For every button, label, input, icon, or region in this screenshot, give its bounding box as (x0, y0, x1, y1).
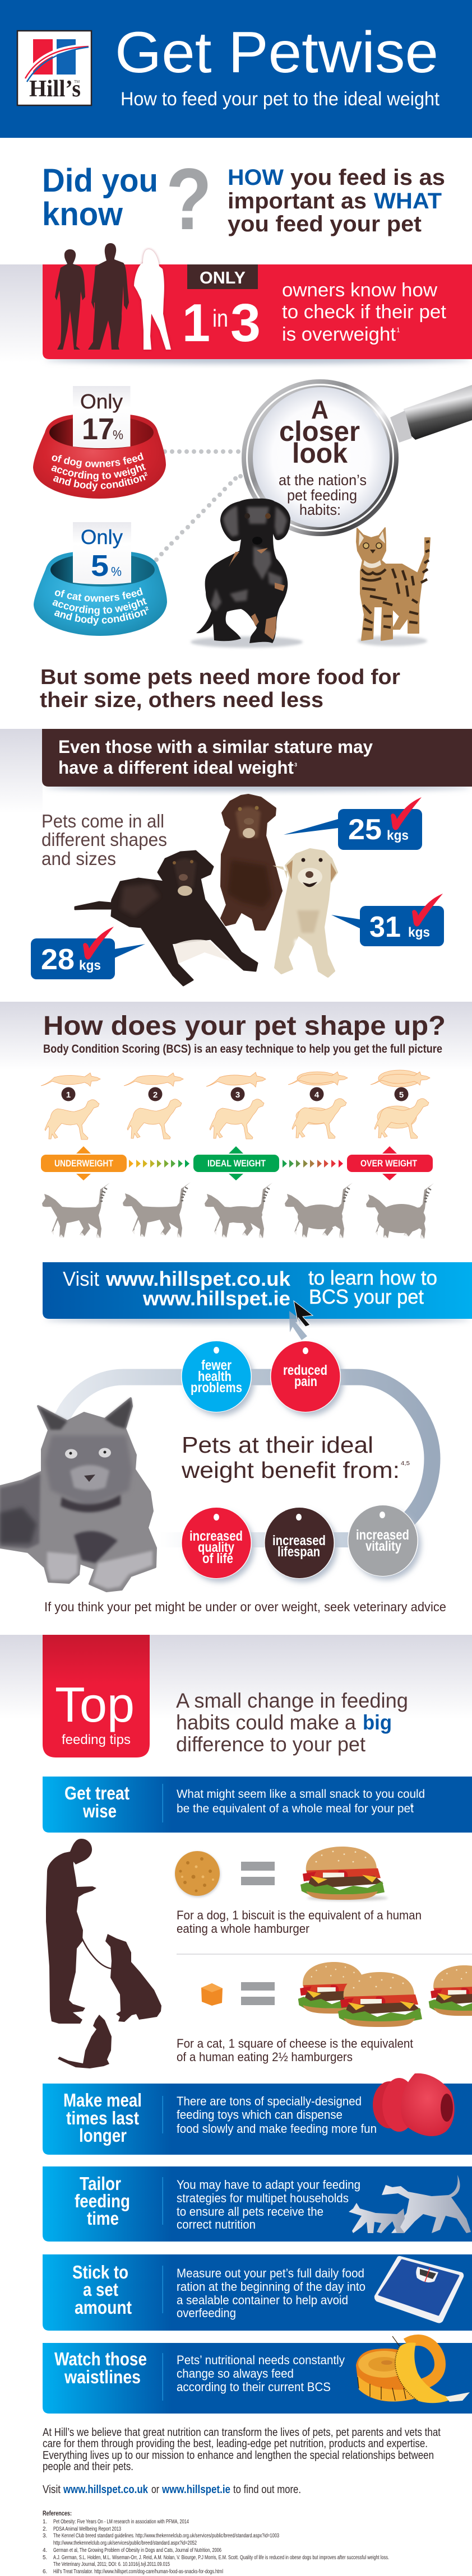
text: pets come in all shapes (41, 811, 167, 869)
score numbers: 5 (399, 1090, 404, 1100)
intro text (176, 1689, 408, 1756)
panel: visit website banner: www.hillspet.co.uk (105, 1267, 291, 1290)
icon: red feeding toy (373, 2073, 455, 2136)
tip bar: make meal times last longer: Make meal (63, 2090, 142, 2110)
tip bar: tailor feeding time: to ensure all pets receive the (177, 2205, 323, 2219)
icon: grey cat (0, 1398, 156, 1591)
callout: 31 kgs (331, 894, 444, 946)
tag: reduced pain (270, 1341, 344, 1416)
red tab: Top (55, 1677, 135, 1732)
references: Hill's Treat Translator. http://www.hillspet.com/dog-care/human-food-as-snacks-for-dogs.html (53, 2569, 223, 2575)
icon: blue cat bowl with 5 percent: 5 (91, 549, 109, 583)
tip bar: stick to a set amount: Measure out your pet’s full daily food (177, 2266, 364, 2280)
callout: 25 kgs (284, 797, 422, 850)
text: visit links: or (151, 2483, 159, 2496)
icon: red dog bowl with 17 percent: and body condition² (53, 472, 148, 491)
intro text: difference to your pet (176, 1733, 366, 1756)
heading: how does your pet shape up: How does your pet shape up? (43, 1011, 446, 1041)
icon: Hill's logo (17, 31, 91, 105)
tag: reduced pain: pain (294, 1374, 317, 1389)
tip bar: stick to a set amount: amount (75, 2297, 132, 2318)
tip bar: get treat wise: be the equivalent of a whole meal for your pet (177, 1802, 414, 1815)
text: a closer look: pet feeding (287, 487, 357, 504)
underweight label (41, 1146, 127, 1180)
tag: increased vitality: increased (356, 1527, 409, 1543)
text: cat cheese equivalent: For a cat, 1 square of cheese is the equivalent (177, 2036, 413, 2050)
tip bar: tailor feeding time: Tailor (80, 2173, 121, 2194)
callout: 31 kgs: 31 (369, 911, 401, 943)
text: pets come in all shapes: different shapes (41, 829, 167, 850)
icon: blue cat bowl with 5 percent: % (111, 564, 122, 579)
references: 1. (43, 2519, 47, 2525)
tip bar: make meal times last longer: There are tons of specially-designed (177, 2094, 362, 2108)
tip bar: make meal times last longer: times last (66, 2108, 139, 2128)
side view dogs (45, 1099, 429, 1140)
heading: some pets need more food: their size, others need less (40, 689, 323, 712)
score numbers: 1 (66, 1090, 71, 1100)
key message: you feed is as (290, 165, 445, 190)
stat text: is overweight (282, 324, 396, 345)
icon: red dog bowl with 17 percent: Only (80, 390, 123, 413)
yellow labrador (272, 849, 337, 977)
references: 2. (43, 2526, 47, 2532)
tip bar: stick to a set amount: ration at the beginning of the day into (177, 2280, 365, 2294)
underweight label: UNDERWEIGHT (54, 1158, 113, 1169)
score numbers (62, 1087, 408, 1101)
tip bar: watch those waistlines: waistlines (64, 2366, 141, 2387)
text: a closer look: at the nation’s (279, 472, 367, 489)
tag: fewer health problems: fewer (201, 1357, 232, 1373)
references: 5. (43, 2555, 47, 2561)
tip bar: get treat wise: Get treat (64, 1783, 129, 1803)
score numbers: 4 (314, 1090, 320, 1100)
tip bar: get treat wise: 6 (410, 1803, 414, 1809)
1 in 3 stat: in (212, 305, 228, 332)
ideal weight label (193, 1146, 279, 1180)
callout: 28 kgs (31, 927, 145, 979)
1 in 3 stat: 3 (230, 293, 261, 353)
arrows to ideal (129, 1160, 189, 1168)
text: visit links: Visit (43, 2483, 61, 2496)
references: 4. (43, 2547, 47, 2554)
tip bar: tailor feeding time: correct nutrition (177, 2217, 256, 2231)
tip bar: make meal times last longer: food slowly and make feeding more fun (177, 2122, 377, 2136)
icon: blue cat bowl with 5 percent: according to weight (53, 598, 147, 616)
references: Pet Obesity: Five Years On - LM research in association with PFMA, 2014 (53, 2519, 189, 2525)
benefits ring track (60, 1377, 432, 1547)
tip bar: get treat wise (43, 1777, 472, 1833)
text: pets come in all shapes: and sizes (41, 848, 116, 869)
icon: magnifying glass (242, 379, 472, 536)
icon: blue cat bowl with 5 percent: and body condition² (54, 606, 149, 626)
icon: Hill's logo: TM (74, 80, 80, 84)
red tab (43, 1635, 150, 1757)
text: dog biscuit equivalent (177, 1908, 422, 1936)
text: seek veterinary advice: If you think your pet might be under or over weight, seek veterinary advice (44, 1599, 446, 1614)
text: a closer look: look (292, 438, 348, 469)
key message (228, 165, 445, 236)
panel: visit website banner: BCS your pet (309, 1285, 424, 1308)
tip bar: stick to a set amount (43, 2254, 472, 2331)
weight scale legend (41, 1146, 433, 1180)
paragraph: about Hill's (43, 2426, 441, 2473)
icon: blue cat bowl with 5 percent (34, 522, 167, 636)
callout: 25 kgs: kgs (387, 828, 409, 843)
heading: some pets need more food: But some pets need more food for (40, 666, 400, 689)
key message: important as (228, 189, 367, 213)
tag: increased quality of life: quality (198, 1540, 234, 1555)
stat text (282, 280, 447, 345)
tag: increased vitality (348, 1505, 421, 1580)
icon: red dog bowl with 17 percent: according to weight (52, 463, 146, 482)
panel: body condition scoring (0, 1002, 472, 1070)
references: The Veterinary Journal, 2011; DOI: 6. 10.1016/j.tvjl.2011.09.015 (53, 2561, 170, 2568)
red tab: feeding tips (62, 1732, 131, 1747)
tag: fewer health problems: health (198, 1369, 232, 1384)
callout: 28 kgs: 28 (41, 943, 75, 976)
tag: fewer health problems (181, 1341, 254, 1416)
tip bar: stick to a set amount: overfeeding (177, 2306, 236, 2320)
tip bar: watch those waistlines: Watch those (54, 2349, 147, 2369)
icon: cheese cube (201, 1983, 223, 2006)
references: German et al, The Growing Problem of Obesity in Dogs and Cats, Journal of Nutrition, 2006 (53, 2547, 221, 2554)
references: PDSA Animal Wellbeing Report 2013 (53, 2526, 121, 2532)
tip bar: make meal times last longer: feeding toys which can dispense (177, 2108, 343, 2122)
callout: 25 kgs: 25 (348, 813, 382, 846)
heading: some pets need more food (40, 666, 400, 712)
panel: visit website banner (43, 1262, 472, 1323)
tip bar: tailor feeding time: time (87, 2208, 119, 2229)
icon: two and a half hamburgers (298, 1962, 472, 2027)
icon: blue cat bowl with 5 percent: of cat owners feed (55, 587, 143, 602)
icon: cursor arrow (289, 1301, 313, 1340)
score numbers: 2 (153, 1090, 158, 1100)
intro text: habits could make a (176, 1711, 356, 1734)
panel: visit website banner: www.hillspet.ie (142, 1287, 290, 1310)
tag: increased lifespan: lifespan (277, 1544, 320, 1560)
tag: increased lifespan (264, 1507, 337, 1582)
tag: increased quality of life: increased (189, 1528, 243, 1544)
side view cats (42, 1182, 434, 1239)
icon: equals sign cat (241, 1982, 275, 2005)
stat text: 1 (396, 326, 400, 334)
icon: man with dog and cat silhouettes (46, 1839, 161, 2068)
panel: similar stature banner: Even those with a similar stature may (58, 737, 373, 757)
tag: fewer health problems: problems (191, 1380, 242, 1396)
icon: three labradors (75, 795, 337, 985)
stat text: to check if their pet (282, 301, 447, 323)
text: a closer look: A (311, 395, 328, 424)
tip bar: tailor feeding time: strategies for multipet households (177, 2191, 349, 2205)
over weight label: OVER WEIGHT (360, 1158, 418, 1169)
1 in 3 stat (182, 293, 261, 353)
panel: top feeding tips (0, 1635, 472, 1757)
icon: weighing scale (374, 2256, 464, 2323)
icon: equals sign dog (241, 1862, 275, 1885)
references: 6. (43, 2569, 47, 2575)
icon: hamburger (300, 1847, 388, 1901)
icon: red dog bowl with 17 percent: 17 (82, 412, 114, 446)
tip bar: watch those waistlines: change so always feed (177, 2366, 294, 2380)
callout: 31 kgs: kgs (408, 925, 430, 940)
only tag (187, 264, 258, 289)
panel: 1 in 3 owners (0, 243, 472, 364)
text: visit links: www.hillspet.co.uk (63, 2483, 148, 2496)
score numbers: 3 (235, 1090, 240, 1100)
text: pets at ideal weight: weight benefit from: (181, 1457, 400, 1483)
icon: silver dog and cat (349, 2175, 471, 2233)
over weight label (347, 1146, 433, 1180)
paragraph: about Hill's: people and their pets. (43, 2460, 133, 2473)
text: dog biscuit equivalent: eating a whole hamburger (177, 1922, 309, 1936)
text: visit links: to find out more. (233, 2483, 301, 2496)
only tag: ONLY (200, 268, 246, 287)
tag: increased quality of life (181, 1507, 254, 1582)
text: a closer look (279, 395, 367, 518)
text: cat cheese equivalent (177, 2036, 413, 2064)
icon: Hill's logo: Hill’s (29, 76, 81, 102)
icon: red dog bowl with 17 percent: % (113, 427, 123, 442)
did you know heading: Did you (42, 162, 158, 199)
text: cat cheese equivalent: of a human eating 2½ hamburgers (177, 2050, 353, 2064)
icon: blue cat bowl with 5 percent: Only (81, 526, 123, 548)
arrows to over (283, 1160, 343, 1168)
tip bar: stick to a set amount: Stick to (72, 2262, 128, 2282)
text: a closer look: habits: (299, 501, 341, 518)
icon: measuring tape (356, 2336, 470, 2403)
stat text: owners know how (282, 280, 437, 301)
key message: WHAT (374, 189, 442, 213)
text: visit links: www.hillspet.ie (161, 2483, 230, 2496)
header banner (0, 0, 472, 138)
text: pets come in all shapes: Pets come in all (41, 811, 164, 831)
tip bar: watch those waistlines: according to their current BCS (177, 2380, 331, 2394)
references: 3. (43, 2533, 47, 2539)
1 in 3 stat: 1 (182, 293, 210, 353)
text: pets at ideal weight: Pets at their ideal (182, 1432, 373, 1458)
people silhouettes (55, 243, 171, 350)
references: References: (43, 2509, 72, 2517)
dotted connector lines (154, 449, 243, 562)
text: pets at ideal weight (181, 1432, 410, 1483)
tip bar: get treat wise: wise (82, 1801, 117, 1821)
title: Get Petwise (115, 20, 438, 85)
icon: dachshund (191, 499, 303, 648)
panel: similar stature banner (0, 729, 472, 813)
text: dog biscuit equivalent: For a dog, 1 biscuit is the equivalent of a human (177, 1908, 422, 1922)
tag: reduced pain: reduced (283, 1363, 327, 1378)
icon: red dog bowl with 17 percent (33, 386, 166, 499)
key message: you feed your pet (228, 212, 422, 236)
tag: increased vitality: vitality (365, 1538, 401, 1554)
references (43, 2509, 389, 2575)
subtitle: How to feed your pet to the ideal weight (121, 89, 440, 110)
panel: visit website banner: to learn how to (308, 1266, 437, 1289)
text: pets at ideal weight: 4,5 (401, 1461, 410, 1467)
intro text: A small change in feeding (176, 1689, 408, 1712)
tip bar: watch those waistlines (43, 2343, 472, 2414)
tip bar: tailor feeding time (43, 2166, 472, 2242)
tag: increased lifespan: increased (272, 1533, 326, 1549)
tip bar: stick to a set amount: a sealable container to help avoid (177, 2293, 348, 2307)
intro text: big (363, 1711, 392, 1734)
tip bar: watch those waistlines: Pets’ nutritional needs constantly (177, 2353, 345, 2367)
tag: increased quality of life: of life (202, 1551, 233, 1566)
did you know heading (42, 151, 212, 248)
icon: bengal cat (357, 528, 430, 646)
panel: visit website banner: Visit (63, 1267, 99, 1290)
references: http://www.thekennelclub.org.uk/services/public/breed/standard.aspx?id=2052 (53, 2540, 197, 2546)
did you know heading: know (42, 196, 123, 233)
tip bar: make meal times last longer: longer (79, 2125, 127, 2146)
tip bar: tailor feeding time: You may have to adapt your feeding (177, 2178, 360, 2192)
references: The Kennel Club breed standard guidelines. http://www.thekennelclub.org.uk/services/public/breed/standard.aspx?id=1003 (53, 2533, 279, 2539)
top view dogs (41, 1070, 430, 1087)
icon: biscuit (175, 1851, 220, 1897)
text: a closer look: closer (279, 416, 360, 447)
callout: 28 kgs: kgs (79, 958, 101, 973)
panel: similar stature banner: have a different ideal weight (58, 757, 294, 778)
tip bar: make meal times last longer (43, 2084, 472, 2155)
black labrador (75, 851, 257, 985)
tip bar: get treat wise: What might seem like a small snack to you could (177, 1787, 425, 1801)
tip bar: tailor feeding time: feeding (75, 2191, 130, 2211)
key message: HOW (228, 165, 284, 190)
did you know heading: ? (166, 151, 212, 248)
ideal weight label: IDEAL WEIGHT (207, 1158, 266, 1169)
icon: red dog bowl with 17 percent: of dog owners feed (52, 452, 144, 468)
tip bar: stick to a set amount: a set (83, 2279, 118, 2300)
brown labrador (221, 795, 281, 929)
panel: similar stature banner: 3 (294, 762, 297, 768)
text: visit links (43, 2483, 301, 2496)
